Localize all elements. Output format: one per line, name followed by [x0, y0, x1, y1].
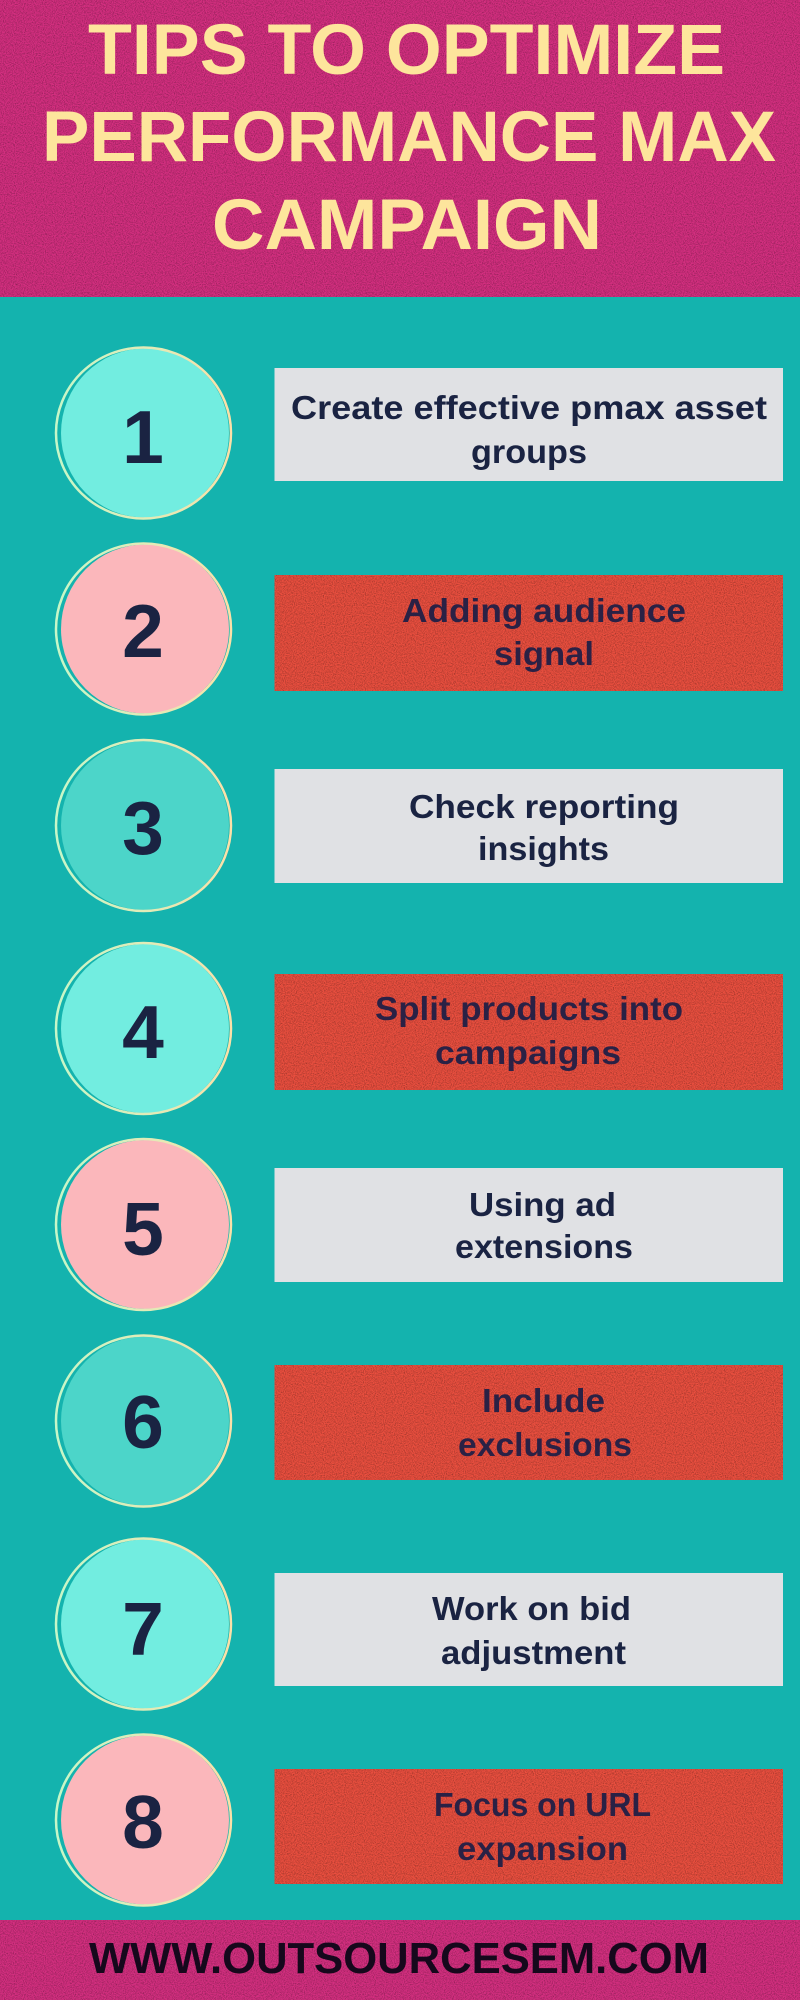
number circle 6: 6 — [122, 1380, 164, 1464]
text box 6: exclusions — [458, 1426, 632, 1463]
text box 4: campaigns — [435, 1034, 621, 1071]
text box 1 — [274, 368, 783, 481]
text box 6: Include — [482, 1382, 605, 1419]
title: TIPS TO OPTIMIZE — [88, 11, 725, 90]
text box 3: Check reporting — [409, 788, 679, 825]
tip 1 — [56, 348, 783, 518]
text box 4: Split products into — [375, 990, 683, 1027]
text box 3 — [274, 769, 783, 883]
text box 6 — [274, 1365, 783, 1480]
text box 8: Focus on URL — [434, 1786, 651, 1823]
text box 8: expansion — [457, 1830, 628, 1867]
number circle 3: 3 — [122, 786, 164, 870]
number circle 5 — [56, 1139, 231, 1310]
tip 2 — [56, 544, 783, 714]
website url: WWW.OUTSOURCESEM.COM — [89, 1934, 709, 1983]
number circle 7 — [56, 1538, 231, 1710]
number circle 8 — [56, 1734, 231, 1906]
number circle 2: 2 — [122, 589, 164, 673]
text box 7 — [274, 1573, 783, 1686]
text box 8 — [274, 1769, 783, 1884]
tip 5 — [56, 1139, 783, 1310]
number circle 4 — [56, 943, 231, 1114]
text box 1: Create effective pmax asset — [291, 389, 767, 426]
text box 7: Work on bid — [432, 1590, 631, 1627]
number circle 8: 8 — [122, 1780, 164, 1864]
title: CAMPAIGN — [212, 186, 602, 265]
tip 3 — [56, 740, 783, 911]
tip 4 — [56, 943, 783, 1114]
footer panel — [0, 1920, 800, 2000]
title: PERFORMANCE MAX — [42, 98, 776, 177]
header panel — [0, 0, 800, 297]
text box 2: signal — [494, 635, 594, 672]
number circle 7: 7 — [122, 1587, 164, 1671]
tip 8 — [56, 1734, 783, 1906]
text box 3: insights — [478, 830, 609, 867]
number circle 6 — [56, 1336, 231, 1506]
tip 7 — [56, 1538, 783, 1710]
number circle 1 — [56, 348, 231, 518]
tip 6 — [56, 1336, 783, 1506]
text box 7: adjustment — [441, 1634, 626, 1671]
text box 4 — [274, 974, 783, 1090]
number circle 2 — [56, 544, 231, 714]
text box 5: extensions — [455, 1228, 633, 1265]
number circle 3 — [56, 740, 231, 911]
title — [42, 11, 776, 265]
number circle 5: 5 — [122, 1187, 164, 1271]
text box 5 — [274, 1168, 783, 1282]
number circle 4: 4 — [122, 990, 164, 1074]
text box 2 — [274, 575, 783, 691]
text box 5: Using ad — [469, 1186, 616, 1223]
number circle 1: 1 — [122, 395, 164, 479]
text box 1: groups — [471, 433, 587, 470]
text box 2: Adding audience — [402, 592, 686, 629]
